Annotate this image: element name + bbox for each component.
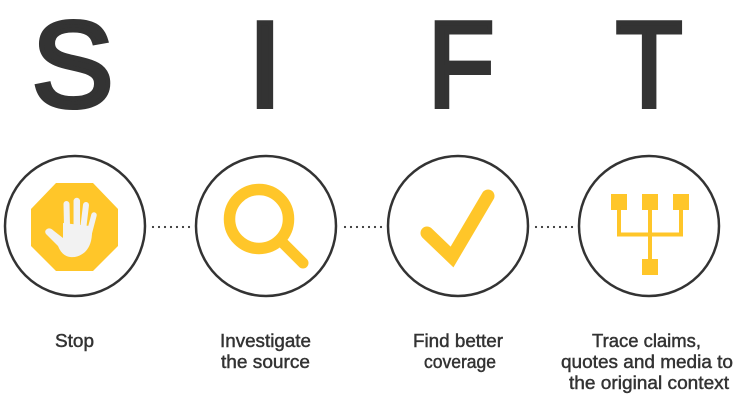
label: Find better coverage: [413, 331, 503, 372]
circle outline: [5, 156, 145, 296]
stop sign octagon: [31, 183, 118, 271]
step 4: trace icon: [579, 156, 719, 296]
circle outline: [388, 156, 528, 296]
label: Stop: Stop: [55, 331, 94, 351]
connector dots 3: [535, 226, 573, 228]
label: Trace claims, quotes and media to the original context: the original context: [569, 373, 729, 393]
letter F: F: [428, 0, 494, 133]
check mark: [427, 196, 488, 257]
letter I: I: [248, 0, 282, 132]
label: Trace claims, quotes and media to the original context: [561, 331, 733, 393]
circle outline: [579, 156, 719, 296]
step 1: stop icon: [5, 156, 145, 296]
connector dots 2: [344, 226, 382, 228]
step 2: investigate icon: [196, 156, 336, 296]
magnifying glass: [230, 190, 303, 263]
label: Trace claims, quotes and media to the original context: Trace claims,: [592, 331, 701, 351]
label: Find better coverage: Find better: [413, 331, 503, 351]
label: Investigate the source: Investigate: [220, 331, 311, 351]
letter T: T: [616, 0, 682, 133]
label: Investigate the source: the source: [221, 352, 310, 372]
step 3: find better coverage icon: [388, 156, 528, 296]
label: Investigate the source: [220, 331, 311, 372]
title letters: SIFT: [32, 0, 682, 133]
branching tree diagram: [611, 194, 689, 275]
letter S: S: [32, 0, 113, 132]
hand: [45, 201, 94, 257]
connector dots 1: [152, 226, 190, 228]
label: Trace claims, quotes and media to the original context: quotes and media to: [561, 352, 733, 372]
circle outline: [196, 156, 336, 296]
label: Find better coverage: coverage: [424, 352, 496, 372]
